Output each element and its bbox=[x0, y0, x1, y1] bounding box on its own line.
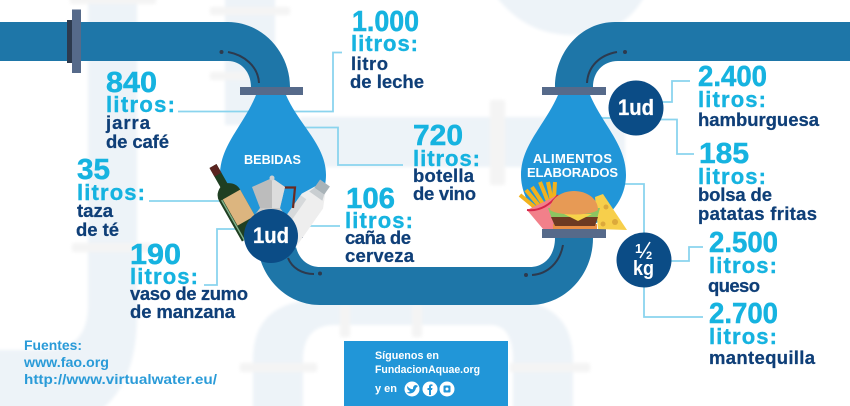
circle: half kilo: 1 bbox=[635, 241, 642, 256]
callout: 190 litros vaso de zumo de manzana: vaso de zumo bbox=[130, 283, 248, 304]
callout: 2.400 litros hamburguesa: 2.400 bbox=[698, 61, 767, 93]
callout: 35 litros taza de té: 35 bbox=[77, 154, 110, 186]
callout: 185 litros bolsa de patatas fritas: 185 bbox=[699, 138, 749, 170]
callout: 185 litros bolsa de patatas fritas: bolsa de bbox=[698, 184, 772, 205]
icon: milk bottle bbox=[274, 176, 336, 248]
panel: follow us bbox=[344, 341, 508, 406]
circle: 1 ud bebidas bbox=[244, 209, 298, 263]
callout: 35 litros taza de té: taza bbox=[77, 200, 114, 221]
circle: 1 ud bebidas: 1ud bbox=[253, 223, 289, 248]
flange: alimentos bottom bbox=[542, 229, 606, 238]
icon: wine bottle bbox=[203, 160, 263, 242]
callout: 106 litros caña de cerveza: 106 bbox=[346, 183, 395, 215]
flange: bebidas bottom bbox=[240, 229, 303, 238]
callout: 2.400 litros hamburguesa: litros: bbox=[698, 87, 766, 112]
callout: 840 litros jarra de café: de café bbox=[106, 131, 169, 152]
callout: 1.000 litros litro de leche: 1.000 bbox=[352, 6, 419, 38]
callout: 2.500 litros queso: queso bbox=[708, 275, 760, 296]
circle: 1 ud alimentos bbox=[608, 80, 664, 136]
circle: 1 ud alimentos: 1ud bbox=[618, 95, 654, 120]
callout: 1.000 litros litro de leche: litros: bbox=[351, 31, 418, 56]
label: alimentos elaborados: ALIMENTOS bbox=[533, 151, 612, 166]
flange: alimentos top bbox=[542, 87, 606, 95]
circle: half kilo: kg bbox=[633, 258, 654, 280]
callout: 720 litros botella de vino: botella bbox=[413, 165, 475, 186]
callout: 2.400 litros hamburguesa: hamburguesa bbox=[698, 109, 820, 130]
callout: 840 litros jarra de café: 840 bbox=[106, 67, 157, 99]
callout: 190 litros vaso de zumo de manzana: de manzana bbox=[130, 301, 236, 322]
icon: fries bbox=[520, 182, 558, 229]
panel: follow us: FundacionAquae.org bbox=[375, 364, 480, 376]
icon: instagram bbox=[440, 382, 454, 396]
flange: left bbox=[67, 10, 81, 73]
label: alimentos elaborados: ELABORADOS bbox=[527, 165, 618, 180]
pipe: top left bbox=[0, 22, 290, 87]
callout: 2.700 litros mantequilla: mantequilla bbox=[709, 347, 816, 368]
callout: 2.500 litros queso: 2.500 bbox=[709, 227, 778, 259]
callout: 1.000 litros litro de leche bbox=[350, 6, 424, 92]
connector lines bbox=[149, 52, 703, 317]
callout: 1.000 litros litro de leche: litro bbox=[351, 53, 388, 74]
callout: 720 litros botella de vino bbox=[413, 120, 480, 204]
callout: 2.700 litros mantequilla: 2.700 bbox=[709, 298, 778, 330]
panel: follow us: Síguenos en bbox=[375, 350, 439, 362]
callout: 106 litros caña de cerveza: litros: bbox=[345, 208, 413, 233]
panel: follow us: y en bbox=[375, 383, 397, 395]
callout: 720 litros botella de vino: litros: bbox=[413, 146, 480, 171]
callout: 106 litros caña de cerveza: caña de bbox=[345, 227, 411, 248]
callout: 720 litros botella de vino: de vino bbox=[413, 183, 476, 204]
callout: 2.500 litros queso: litros: bbox=[709, 253, 777, 278]
pipe: top right bbox=[555, 22, 850, 87]
drop: alimentos elaborados bbox=[521, 95, 626, 229]
callout: 185 litros bolsa de patatas fritas bbox=[698, 138, 817, 224]
pipe highlight bbox=[228, 52, 259, 83]
callout: 185 litros bolsa de patatas fritas: patatas fritas bbox=[698, 203, 817, 224]
callout: 190 litros vaso de zumo de manzana: 190 bbox=[130, 239, 181, 271]
sources bbox=[23, 338, 217, 387]
sources: Fuentes: bbox=[24, 338, 82, 353]
callout: 106 litros caña de cerveza: cerveza bbox=[345, 245, 415, 266]
sources: www.fao.org bbox=[23, 355, 109, 370]
callout: 2.700 litros mantequilla: litros: bbox=[709, 324, 777, 349]
sources: http://www.virtualwater.eu/ bbox=[24, 372, 217, 387]
callout: 840 litros jarra de café: jarra bbox=[105, 112, 151, 133]
icon: facebook bbox=[422, 382, 438, 396]
callout: 190 litros vaso de zumo de manzana bbox=[130, 239, 248, 322]
background watermark pipes bbox=[0, 0, 645, 406]
drop: bebidas bbox=[220, 95, 326, 229]
callout: 720 litros botella de vino: 720 bbox=[413, 120, 463, 152]
callout: 35 litros taza de té: litros: bbox=[77, 180, 145, 205]
icon: twitter bbox=[404, 382, 420, 396]
flange: bebidas top bbox=[240, 87, 303, 95]
callout: 185 litros bolsa de patatas fritas: litros: bbox=[698, 164, 766, 189]
callout: 2.500 litros queso bbox=[708, 227, 778, 296]
callout: 840 litros jarra de café bbox=[105, 67, 175, 152]
label: bebidas: BEBIDAS bbox=[244, 152, 301, 167]
icon: moka pot bbox=[252, 176, 295, 216]
callout: 2.400 litros hamburguesa bbox=[698, 61, 820, 130]
label: alimentos elaborados bbox=[527, 151, 618, 180]
pipe: bottom connecting bbox=[257, 238, 593, 305]
callout: 2.700 litros mantequilla bbox=[709, 298, 816, 368]
callout: 1.000 litros litro de leche: de leche bbox=[350, 71, 424, 92]
callout: 190 litros vaso de zumo de manzana: litros: bbox=[130, 264, 198, 289]
icon: cheese bbox=[595, 194, 627, 230]
icon: burger bbox=[548, 191, 600, 229]
callout: 840 litros jarra de café: litros: bbox=[106, 92, 175, 117]
circle: half kilo bbox=[616, 232, 672, 288]
callout: 106 litros caña de cerveza bbox=[345, 183, 415, 266]
circle: half kilo: 2 bbox=[646, 250, 652, 262]
callout: 35 litros taza de té: de té bbox=[76, 219, 119, 240]
callout: 35 litros taza de té bbox=[76, 154, 145, 240]
